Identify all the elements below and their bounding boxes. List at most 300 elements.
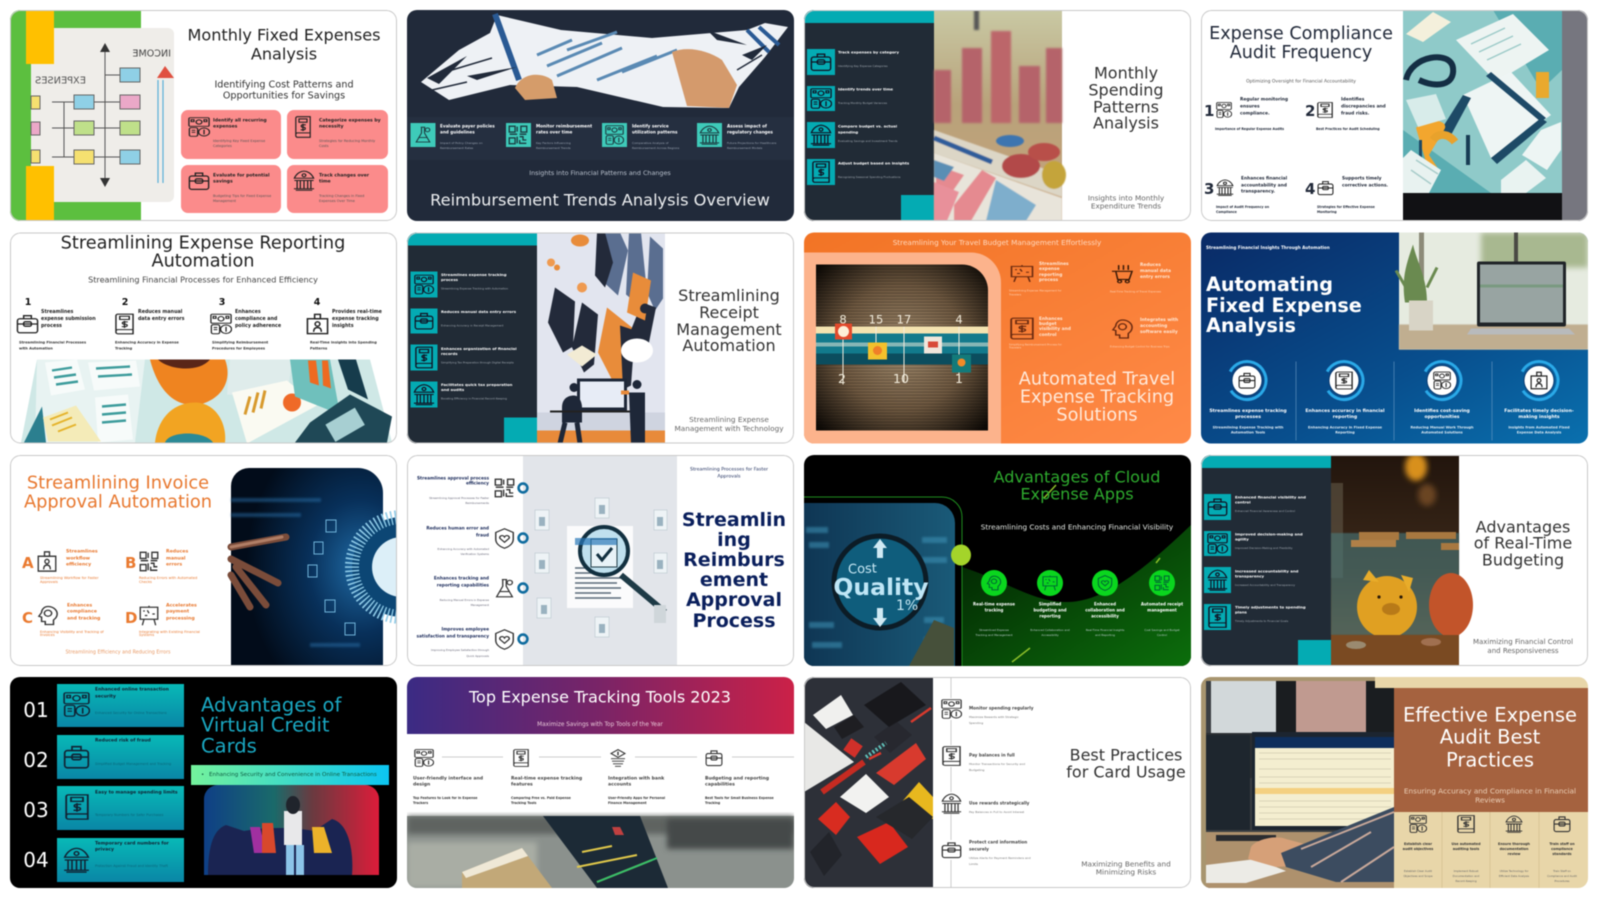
item 3: transparency. xyxy=(1241,188,1275,194)
column: audit objectives: Objectives and Scope xyxy=(1403,874,1433,878)
column: auditing tools: Implement Robust xyxy=(1454,869,1478,873)
tool 2: Tracking Tools xyxy=(511,801,537,805)
title: Advantages of Cloud xyxy=(994,468,1160,486)
title: Process xyxy=(692,610,776,632)
item 1 xyxy=(1204,96,1288,131)
card: potential savings: savings xyxy=(213,178,233,184)
slide: Automating Fixed Expense Analysis xyxy=(1201,232,1588,444)
item: reporting: Streamlines xyxy=(1039,261,1069,267)
item: tracking: Streamlines expense tracking xyxy=(1209,408,1287,414)
subtitle: Streamlining Processes for Faster xyxy=(690,466,768,472)
item: reporting: reporting xyxy=(1039,272,1062,278)
tagline: Streamlining Financial Insights Through Automation xyxy=(1206,245,1330,250)
item: accuracy: reporting xyxy=(1333,414,1357,420)
title: Expense Tracking xyxy=(1020,388,1174,408)
step 3: compliance and xyxy=(235,316,278,322)
item: accuracy: Enhances accuracy in financial xyxy=(1305,408,1385,414)
item: policies: and guidelines xyxy=(440,130,475,134)
title panel: Reviews xyxy=(1475,796,1505,804)
photo: timeline on wood: 2 xyxy=(838,371,846,386)
row 02: Reduced risk of fraud xyxy=(95,738,151,744)
item: reporting: process xyxy=(1039,277,1059,283)
item D: payment xyxy=(166,608,190,614)
item: data entry: Reduces manual data entry errors xyxy=(441,309,517,314)
card: track changes: Tracking Changes in Fixed xyxy=(318,194,364,198)
item: track by category xyxy=(807,49,899,75)
item 1: Regular monitoring xyxy=(1240,96,1288,102)
photo: phone on blurred desk xyxy=(407,816,794,888)
item B: Reduces xyxy=(166,548,188,554)
item: policies: Evaluate payer policies xyxy=(440,124,495,128)
item 2 xyxy=(1305,96,1386,131)
item: tax preparation xyxy=(410,382,513,408)
item: data entry xyxy=(1110,262,1171,294)
item: collaboration: and Reporting xyxy=(1095,633,1115,637)
card: potential savings: Management xyxy=(213,199,237,203)
item: accuracy xyxy=(1305,356,1385,434)
item: human error: Reduces human error and xyxy=(426,526,489,532)
item B: Checks xyxy=(139,580,152,584)
item 1: ensures xyxy=(1240,104,1260,110)
item C: and tracking xyxy=(67,616,100,622)
item: data entry: Enhancing Accuracy in Receipt Management xyxy=(441,324,504,328)
title: Receipt xyxy=(699,303,759,322)
slide: Streamlining Invoice Approval Automation xyxy=(10,455,452,666)
tool 2: Comparing Free vs. Paid Expense xyxy=(511,796,571,800)
column: documentation review: documentation xyxy=(1500,847,1529,851)
item: employee satisfaction: Improving Employee Satisfaction through xyxy=(431,648,489,652)
subtitle xyxy=(214,80,354,102)
subtitle: Approvals xyxy=(717,474,741,480)
title xyxy=(1088,64,1164,132)
subtitle: Maximizing Financial Control xyxy=(1473,638,1573,646)
slide: Automated Travel Expense Tracking Solutions xyxy=(804,232,1191,444)
title xyxy=(1474,518,1572,570)
item B: errors xyxy=(166,562,182,568)
item: cost saving: Automated Solutions xyxy=(1421,430,1463,434)
step 4: 4 xyxy=(314,297,321,308)
subtitle: Streamlining Expense xyxy=(689,415,769,424)
item: human error: fraud xyxy=(476,532,489,538)
item: collaboration: Real-Time Financial Insights xyxy=(1086,628,1125,632)
item: protect card: Utilize Alerts for Payment Reminders and xyxy=(969,856,1031,860)
item: organization: Simplifying Tax Preparation through Digital Receipts xyxy=(441,360,514,364)
title: Advantages xyxy=(1476,518,1570,536)
title: ing xyxy=(717,529,751,551)
card: recurring expenses xyxy=(181,110,281,159)
item: receipt management xyxy=(1141,570,1183,637)
item D: Accelerates xyxy=(166,602,197,608)
photo: magnifier with cost quality xyxy=(804,503,955,666)
item 3: accountability and xyxy=(1241,182,1287,188)
step 1 xyxy=(17,297,96,350)
item B xyxy=(125,548,197,584)
card: potential savings xyxy=(181,165,281,213)
card: track changes: time xyxy=(319,178,331,184)
item: data entry: Reduces xyxy=(1140,262,1161,268)
item 3: Impact of Audit Frequency on xyxy=(1216,205,1270,209)
subtitle: Identifying Cost Patterns and xyxy=(214,80,354,90)
photo: timeline on wood: 17 xyxy=(897,312,911,326)
item A: Approvals xyxy=(40,580,58,584)
title: Approval xyxy=(686,589,782,611)
card: categorize expenses: Categorize expenses by xyxy=(319,118,381,124)
title: Top Expense Tracking Tools 2023 xyxy=(468,688,731,706)
item: budget visibility xyxy=(1008,316,1071,350)
item: visibility: Enhanced financial visibility and xyxy=(1235,494,1306,500)
item: cost saving xyxy=(1410,356,1474,434)
item B: manual xyxy=(166,556,186,562)
item: simplified budgeting: reporting xyxy=(1039,614,1061,618)
item: regulatory: Future Projections for Healthcare xyxy=(727,141,776,145)
slide: Advantages of Cloud Expense Apps xyxy=(804,455,1191,666)
column: auditing tools: Use automated xyxy=(1451,842,1481,846)
item: decision making: agility xyxy=(1235,536,1249,542)
card: potential savings: Budgeting Tips for Fixed Expense xyxy=(213,194,271,198)
column: audit objectives: Establish clear xyxy=(1404,842,1432,846)
header band xyxy=(407,677,794,734)
item: human error: Enhancing Accuracy with Automated xyxy=(437,547,489,551)
row 01 xyxy=(23,684,184,727)
subtitle: and Responsiveness xyxy=(1487,647,1559,655)
item 4: corrective actions. xyxy=(1342,182,1388,188)
item: approval efficiency: Reimbursements xyxy=(465,501,490,505)
tool 3: User-Friendly Apps for Personal xyxy=(608,796,665,800)
item: utilization: Reimbursement Across Regions xyxy=(632,146,680,150)
item: trends: Identify trends over time xyxy=(838,86,893,92)
item: accuracy: Enhancing Accuracy in Fixed Expense xyxy=(1308,426,1383,430)
photo: magnifier with cost quality: Quality xyxy=(833,573,929,601)
title xyxy=(682,509,786,632)
item: tracking: Streamlines expense tracking xyxy=(441,272,507,277)
photo: woman with shopping bags xyxy=(204,785,379,875)
item: data entry: Real-Time Tracking of Travel Expenses xyxy=(1110,290,1162,294)
row 03: Temporary Numbers for Safer Purchases xyxy=(94,813,164,817)
tool 4: Budgeting and reporting xyxy=(705,776,769,782)
item: tracking reporting: reporting capabilities xyxy=(437,582,489,588)
item: reporting: Travelers xyxy=(1008,292,1022,296)
subtitle: Expenditure Trends xyxy=(1091,202,1161,210)
column: audit objectives: audit objectives xyxy=(1403,847,1433,851)
subtitle xyxy=(690,466,768,480)
column: staff training: Train staff on xyxy=(1549,842,1575,846)
photo: timeline on wood xyxy=(816,264,988,430)
tool 3: Integration with bank xyxy=(608,776,665,782)
item: trends: Tracking Monthly Budget Variances xyxy=(837,101,888,105)
item: tax preparation: and audits xyxy=(441,387,465,392)
step 4: insights xyxy=(332,323,354,329)
title: Automated Travel xyxy=(1019,370,1175,390)
title panel: Practices xyxy=(1446,748,1534,772)
item: cost saving: opportunities xyxy=(1424,414,1460,420)
step 2: Tracking xyxy=(115,346,133,350)
subtitle: Maximizing Benefits and xyxy=(1081,860,1171,868)
step 3: Enhances xyxy=(235,309,261,315)
item: rewards: Use rewards strategically xyxy=(969,800,1030,806)
column: staff training: Procedures xyxy=(1555,879,1570,883)
item: tax preparation: Facilitates quick tax preparation xyxy=(441,382,513,387)
item 3: 3 xyxy=(1204,180,1214,198)
item: pay balances: Monitor Transactions for Security and xyxy=(969,762,1025,766)
step 2: data entry errors xyxy=(138,316,185,322)
column: auditing tools xyxy=(1451,816,1481,883)
title: Streamlining xyxy=(678,286,780,305)
row 01: Enhanced online transaction xyxy=(95,686,169,692)
item: data entry: entry errors xyxy=(1140,274,1170,280)
item: employee satisfaction: Quick Approvals xyxy=(466,654,490,658)
item: visibility xyxy=(1204,494,1306,520)
item: collaboration: accessibility xyxy=(1091,614,1119,618)
item A: efficiency xyxy=(66,562,91,568)
item: utilization: Comparative Analysis of xyxy=(632,141,669,145)
item: tracking reporting xyxy=(434,576,527,607)
subtitle: Insights into Financial Patterns and Changes xyxy=(529,169,671,177)
item 3: Compliance xyxy=(1216,210,1237,214)
slide: Advantages of Virtual Credit Cards xyxy=(10,677,397,888)
item: pay balances xyxy=(940,745,1025,772)
title xyxy=(1209,24,1393,63)
column: auditing tools: auditing tools xyxy=(1453,847,1479,851)
tool 1: User-friendly interface and xyxy=(413,776,483,782)
item: receipt management: Cost Savings and Budget xyxy=(1144,628,1180,632)
item D: processing xyxy=(166,616,195,622)
tool 4: Tracking xyxy=(705,801,721,805)
footer: Streamlining Efficiency and Reducing Errors xyxy=(65,650,171,656)
item: pay balances: Pay balances in full xyxy=(969,752,1015,758)
item: tracking xyxy=(410,272,508,298)
title xyxy=(61,234,345,268)
item B: Reducing Errors with Automated xyxy=(139,576,197,580)
illustration: person reviewing reports xyxy=(21,360,392,444)
title: Virtual Credit xyxy=(201,714,330,736)
title xyxy=(1019,370,1175,426)
row 04: 04 xyxy=(23,848,49,872)
item: collaboration: Enhanced xyxy=(1094,602,1116,606)
slide: Streamlining Expense Reporting Automation xyxy=(10,232,397,444)
item: accountability: Increased Accountability and Transparency xyxy=(1235,583,1295,587)
item: tax preparation: Boosting Efficiency in Financial Record-Keeping xyxy=(441,396,507,400)
slide: Reimbursement Trends Analysis Overview xyxy=(407,10,794,221)
column: auditing tools: Documentation and xyxy=(1453,874,1480,878)
column: staff training: Train Staff on xyxy=(1552,869,1571,873)
step 2 xyxy=(115,297,185,350)
slide: Advantages of Real-Time Budgeting xyxy=(1201,453,1588,666)
title: Expense Apps xyxy=(1020,484,1134,504)
item: monitor spending xyxy=(940,698,1034,725)
title: Analysis xyxy=(1093,114,1159,132)
item: approval efficiency xyxy=(417,476,527,505)
header band: Maximize Savings with Top Tools of the Year xyxy=(537,722,663,728)
step 2: Enhancing Accuracy in Expense xyxy=(115,340,179,344)
item 4: Strategies for Effective Expense xyxy=(1317,205,1375,209)
item B: B xyxy=(125,554,136,572)
item: monitor spending: Monitor spending regularly xyxy=(969,706,1034,710)
item: trends xyxy=(807,86,893,111)
item: adjust: Recognizing Seasonal Spending Fluctuations xyxy=(838,175,901,179)
item: adjustments: Timely Adjustments to Financial Goals xyxy=(1234,619,1289,623)
subtitle: Optimizing Oversight for Financial Accountability xyxy=(1246,78,1356,84)
item: employee satisfaction: Improves employee xyxy=(441,626,489,632)
item: accounting integration: Enhancing Budget Control for Business Trips xyxy=(1110,344,1170,348)
photo: piggy banks in jars xyxy=(1331,453,1473,666)
item: monitor spending: Maximize Rewards with Strategic xyxy=(969,715,1019,719)
row 04: privacy xyxy=(95,846,114,852)
column: documentation review: Utilize Technology for xyxy=(1500,869,1529,873)
item: pay balances: Budgeting xyxy=(969,768,985,772)
item C: Enhancing Visibility and Tracking of xyxy=(40,630,104,634)
subtitle bar xyxy=(191,765,389,785)
title panel xyxy=(1394,688,1588,812)
title: Management xyxy=(676,320,782,339)
row 04: Protection Against Fraud and Identity Theft xyxy=(95,864,169,868)
item: protect card: Protect card information xyxy=(969,840,1027,844)
card: track changes: Track changes over xyxy=(319,172,370,178)
row 01: security xyxy=(95,694,116,700)
item: accounting integration: accounting xyxy=(1140,323,1167,329)
step 3: Procedures for Employees xyxy=(212,346,265,350)
title panel: Audit Best xyxy=(1440,726,1541,748)
item: tracking reporting: Management xyxy=(471,603,490,607)
item 1: Importance of Regular Expense Audits xyxy=(1215,127,1284,131)
card: track changes xyxy=(287,165,388,213)
item A xyxy=(22,548,99,584)
item 4: Monitoring xyxy=(1317,210,1337,214)
item: regulatory xyxy=(697,123,776,150)
item: budget visibility: Travelers xyxy=(1008,346,1022,350)
photo: magnifier with cost quality: 1% xyxy=(896,598,918,614)
item: collaboration: collaboration and xyxy=(1085,608,1125,612)
subtitle: Minimizing Risks xyxy=(1096,868,1156,876)
card: recurring expenses: Identifying Key Fixed Expense xyxy=(213,139,265,143)
item 3 xyxy=(1204,176,1288,214)
title: Monthly Fixed Expenses xyxy=(187,26,381,44)
item: accountability: Increased accountability and xyxy=(1235,568,1299,574)
card: categorize expenses: Strategies for Reducing Monthly xyxy=(319,139,375,143)
card: potential savings: Evaluate for potential xyxy=(213,172,270,178)
item: visibility: control xyxy=(1235,500,1251,504)
item: tracking reporting: Enhances tracking and xyxy=(434,576,489,582)
step 4 xyxy=(307,297,383,350)
item: policies xyxy=(410,123,495,150)
row 03: Easy to manage spending limits xyxy=(95,790,178,796)
column: auditing tools: Record-Keeping xyxy=(1455,879,1477,883)
tool 4 xyxy=(705,751,774,805)
column: staff training: standards xyxy=(1552,852,1572,856)
item: receipt management: Control xyxy=(1157,633,1167,637)
item: accounting integration: Integrates with xyxy=(1140,317,1178,323)
item: reporting xyxy=(1008,261,1069,296)
step 2: 2 xyxy=(122,297,128,308)
title: Budgeting xyxy=(1482,550,1564,570)
item 4: 4 xyxy=(1305,180,1315,198)
subtitle: Streamlining Your Travel Budget Management Effortlessly xyxy=(893,238,1102,247)
item D: D xyxy=(125,609,137,627)
column: audit objectives xyxy=(1403,816,1433,878)
subtitle xyxy=(1088,194,1165,210)
item: simplified budgeting xyxy=(1030,570,1070,637)
title: Patterns xyxy=(1093,98,1159,116)
title: Best Practices xyxy=(1070,746,1182,764)
item: protect card: securely xyxy=(969,846,989,852)
item 2: Best Practices for Audit Scheduling xyxy=(1316,127,1380,131)
item: tracking: processes xyxy=(1235,414,1261,420)
column: documentation review: Efficient Data Analysis xyxy=(1499,874,1530,878)
column: documentation review xyxy=(1498,816,1531,878)
step 4: expense tracking xyxy=(332,316,379,322)
photo: bar chart and coins xyxy=(934,10,1066,221)
card: categorize expenses: necessity xyxy=(319,124,343,130)
title: Spending xyxy=(1088,80,1164,100)
item 4: Supports timely xyxy=(1342,176,1382,182)
photo: person auditing spreadsheet xyxy=(1201,677,1394,888)
title: Automation xyxy=(682,336,776,355)
title: Advantages of xyxy=(201,694,342,716)
slide: Best Practices for Card Usage xyxy=(804,677,1191,888)
card: recurring expenses: Categories xyxy=(213,144,232,148)
item: human error: Verification Systems xyxy=(460,552,490,556)
photo: magnifier over document xyxy=(523,455,677,666)
photo: timeline on wood: 8 xyxy=(839,312,847,326)
subtitle bar: • xyxy=(201,772,204,778)
title: Streamlin xyxy=(682,509,786,531)
item: decision making xyxy=(1204,531,1303,556)
item: organization: Enhances organization of financial xyxy=(441,346,517,351)
row 03 xyxy=(23,786,184,830)
card: categorize expenses: Costs xyxy=(319,144,329,148)
item: rewards: Pay Balances in Full to Avoid Interest xyxy=(969,810,1025,814)
title: Audit Frequency xyxy=(1230,43,1372,63)
item: accountability xyxy=(1204,567,1299,593)
subtitle xyxy=(674,415,784,433)
photo: stationery flat lay xyxy=(804,677,933,888)
tool 1: Top Features to Look for in Expense xyxy=(413,796,477,800)
item: organization: records xyxy=(441,351,458,356)
item: monitor rates: Monitor reimbursement xyxy=(536,124,592,128)
tool 1: Trackers xyxy=(413,801,428,805)
item: adjustments: Timely adjustments to spending xyxy=(1235,604,1306,610)
item: accuracy: Reporting xyxy=(1335,430,1355,434)
photo: timeline on wood: 10 xyxy=(893,371,909,386)
item: tracking: Automation Tools xyxy=(1231,430,1265,434)
item D: Systems xyxy=(139,633,154,637)
card: recurring expenses: Identify all recurring xyxy=(213,118,267,124)
column: documentation review: review xyxy=(1508,852,1521,856)
subtitle xyxy=(1081,860,1171,876)
item: monitor rates: Reimbursement Trends xyxy=(536,146,571,150)
title: Monthly xyxy=(1094,64,1158,82)
item: visibility: Enhanced Financial Awareness and Control xyxy=(1235,509,1295,513)
item: reporting: Streamlining Expense Management for xyxy=(1009,288,1062,292)
item: real-time tracking: Real-time expense xyxy=(973,602,1015,606)
slide: Monthly Fixed Expenses Analysis xyxy=(10,10,397,221)
subtitle bar: Enhancing Security and Convenience in Online Transactions xyxy=(209,772,377,778)
slide: Expense Compliance Audit Frequency xyxy=(1201,10,1588,221)
title: Streamlining Invoice xyxy=(27,472,209,494)
item: utilization: Identify service xyxy=(632,124,669,128)
step 1: with Automation xyxy=(19,346,53,350)
item: budget visibility: Simplifying Reimbursement Process for xyxy=(1009,342,1063,346)
subtitle xyxy=(1473,638,1573,655)
item: receipt management: Automated receipt xyxy=(1141,602,1183,606)
row 02: 02 xyxy=(23,748,49,772)
slide: Effective Expense Audit Best Practices xyxy=(1201,677,1588,888)
tool 3: Finance Management xyxy=(608,801,647,805)
item: budget visibility: control xyxy=(1039,332,1057,338)
item C: Invoices xyxy=(40,633,55,637)
item 2: Identifies xyxy=(1341,96,1365,102)
item: budget visibility: Enhances xyxy=(1039,316,1063,322)
item A: A xyxy=(22,554,34,572)
